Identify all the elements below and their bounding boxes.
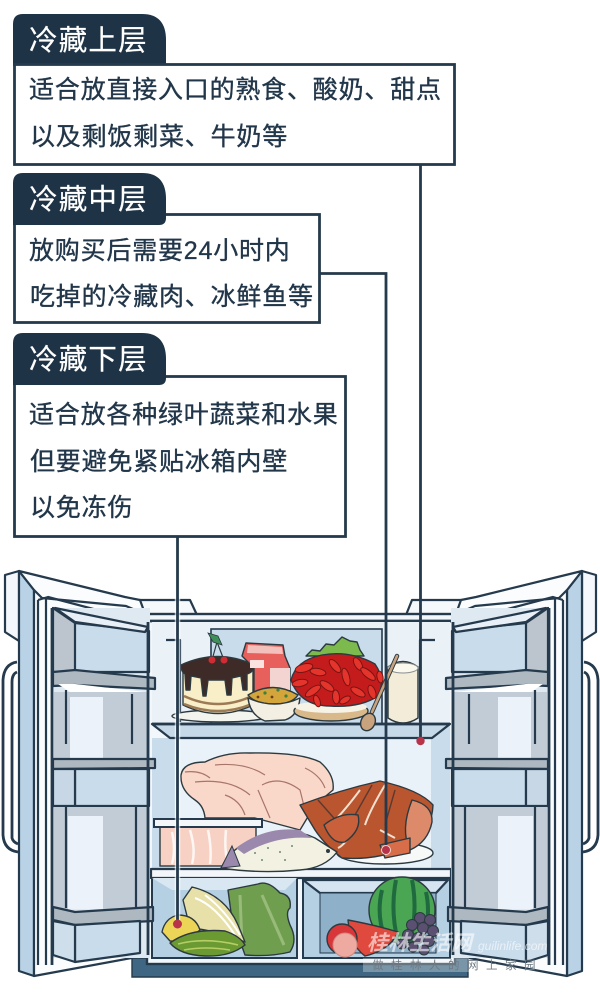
lower left drawer: [152, 878, 297, 958]
watermark: guilinlife.com: [478, 939, 547, 953]
food: bitter melon: [170, 930, 245, 956]
middle shelf text: 吃掉的冷藏肉、冰鲜鱼等: [30, 283, 314, 311]
left door: [3, 571, 155, 976]
food: raw chicken: [181, 753, 333, 830]
food: leafy lettuce: [228, 883, 294, 956]
food: apple: [327, 924, 357, 954]
food: cake: [172, 633, 268, 722]
refrigerator: [3, 571, 598, 977]
upper shelf box: [14, 64, 454, 164]
watermark: [363, 932, 547, 972]
middle shelf text: 放购买后需要24小时内: [29, 237, 291, 265]
lower shelf text: 适合放各种绿叶蔬菜和水果: [29, 401, 339, 429]
right door: [446, 571, 598, 976]
food: peach: [333, 933, 357, 957]
food: yogurt jar: [388, 662, 418, 723]
upper shelf text: [29, 76, 442, 151]
panel: lower shelf: [13, 333, 346, 536]
middle shelf text: [29, 237, 314, 311]
fridge cabinet interior: [147, 614, 455, 964]
fridge base: [132, 958, 468, 977]
upper shelf text: 适合放直接入口的熟食、酸奶、甜点: [29, 76, 442, 104]
panel: middle shelf: [13, 173, 320, 322]
lower shelf text: [29, 401, 339, 522]
lower shelf box: [14, 376, 346, 536]
middle shelf box: [14, 214, 320, 322]
food: milk carton: [242, 643, 290, 692]
lower shelf text: 但要避免紧贴冰箱内壁: [30, 448, 288, 476]
middle shelf tab: [13, 173, 166, 225]
watermark: 桂林生活网: [367, 932, 475, 955]
food: napa cabbage: [183, 887, 245, 942]
leader line: upper shelf: [416, 164, 425, 745]
food: watermelon slice: [348, 920, 398, 956]
watermark: 做桂林人的网上家园: [372, 958, 543, 972]
food: grapes: [397, 912, 438, 955]
food: crawfish plate: [291, 637, 384, 721]
food: wooden spoon: [358, 656, 397, 733]
lower shelf tab: [13, 333, 166, 385]
lower shelf text: 以免冻伤: [30, 494, 133, 522]
upper shelf heading: 冷藏上层: [29, 25, 148, 57]
lower right drawer: [303, 878, 450, 958]
food: corn: [162, 915, 200, 941]
upper shelf text: 以及剩饭剩菜、牛奶等: [30, 123, 288, 151]
food: fish: [221, 829, 337, 872]
upper shelf tab: [13, 14, 166, 66]
food: tray of meat: [154, 819, 262, 866]
panel: upper shelf: [13, 14, 454, 164]
middle shelf heading: 冷藏中层: [29, 184, 148, 216]
fridge crown: [139, 600, 463, 615]
leader line: lower shelf: [173, 537, 182, 928]
food: rice bowl: [248, 688, 300, 721]
leader line: middle shelf: [320, 274, 390, 854]
food: roast ham plate: [300, 781, 433, 864]
lower shelf heading: 冷藏下层: [29, 344, 148, 376]
food: watermelon: [369, 877, 435, 943]
